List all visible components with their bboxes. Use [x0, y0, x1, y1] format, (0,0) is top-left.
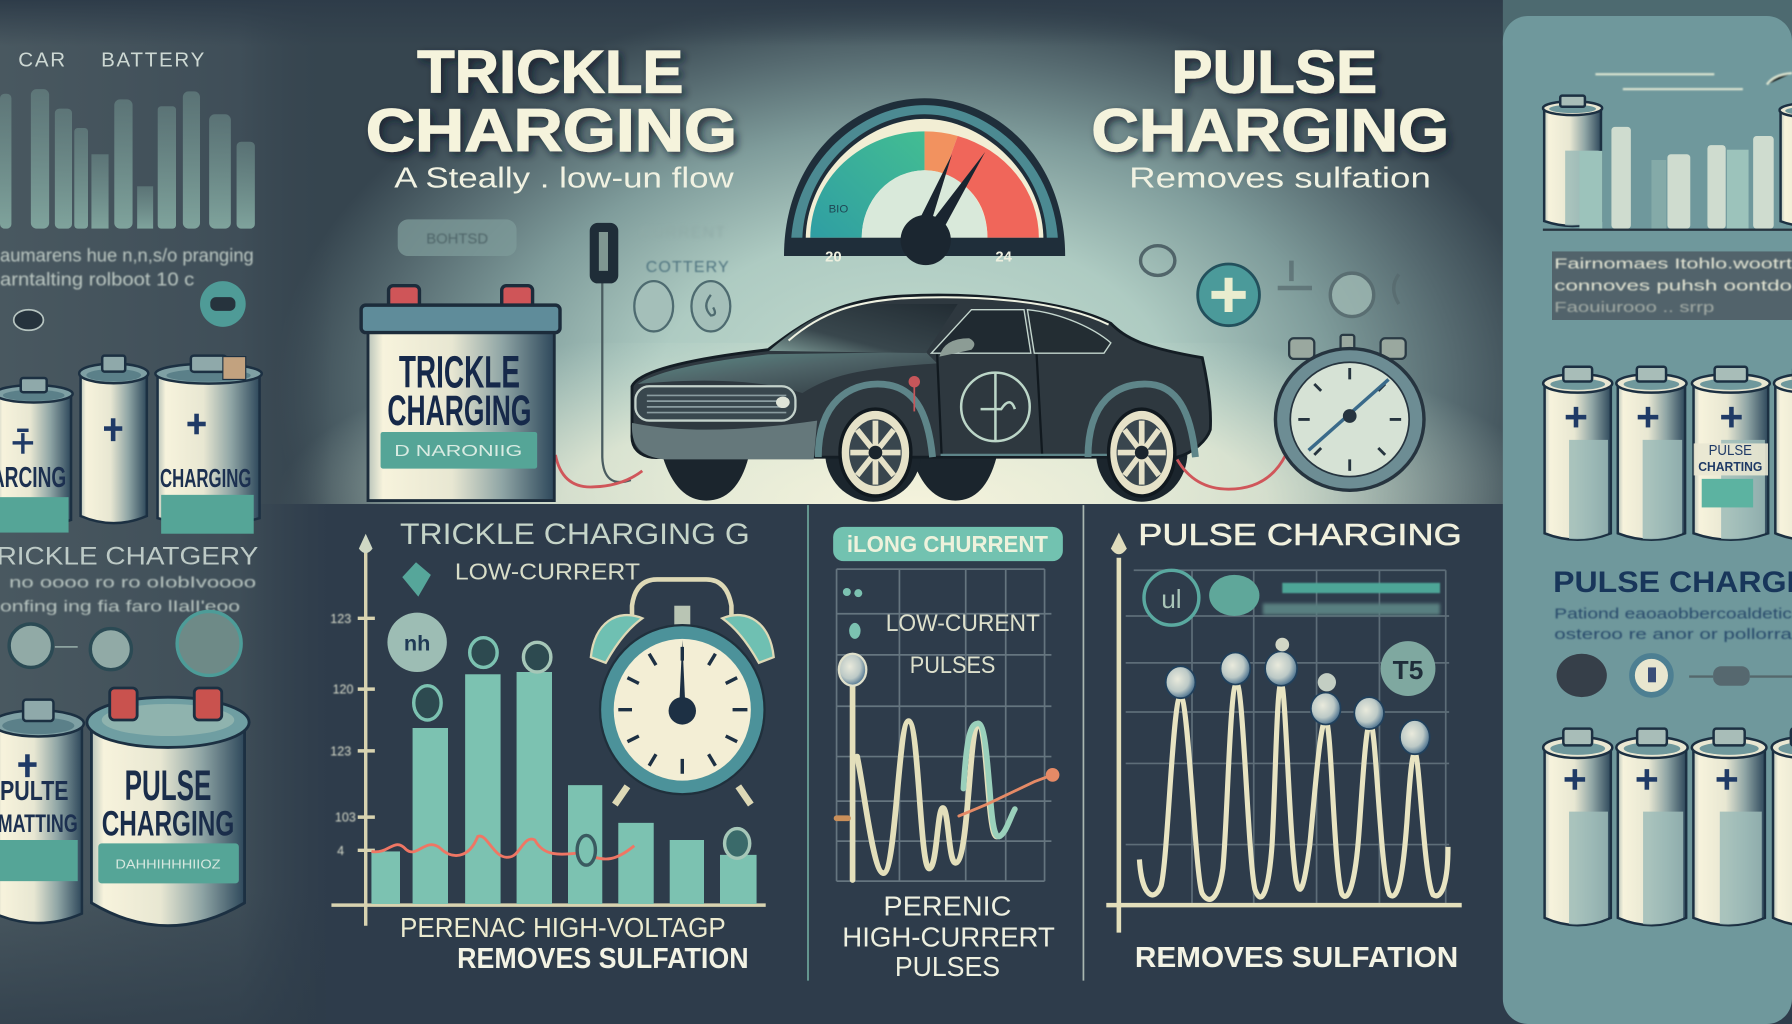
- axis labels: [330, 612, 356, 858]
- battery label text: TRICKLE: [399, 346, 520, 397]
- icon: teal blob: [402, 562, 431, 597]
- car front bumper: [632, 421, 817, 459]
- battery row 1: [1543, 367, 1792, 540]
- text block: blurred description: [1554, 606, 1792, 643]
- caption: periodic high-current pulses: PULSES: [895, 951, 1000, 982]
- alarm clock: [591, 579, 774, 805]
- mirror: [939, 338, 974, 357]
- axis labels: 4: [337, 844, 344, 858]
- heading: trickle charging: TRICKLE CHARGING G: [400, 518, 750, 551]
- caption: periodic high-voltage: PERENAC HIGH-VOLTAGP: [400, 912, 726, 943]
- axes: [331, 534, 766, 926]
- heading: pulse charging: PULSE CHARGING: [1138, 517, 1462, 552]
- front side window: [931, 310, 1031, 353]
- plug and cable: [590, 223, 631, 482]
- car emblem: [961, 373, 1030, 441]
- car body: [632, 295, 1211, 458]
- rear wheel: [1109, 409, 1175, 496]
- text block: blurred description top left: [0, 245, 254, 290]
- red trickle line: [371, 836, 634, 859]
- label: low-current: LOW-CURENT: [886, 610, 1040, 637]
- label: low-current: LOW-CURRERT: [455, 558, 640, 584]
- grid: [1126, 570, 1449, 903]
- decorative title lines: [1595, 73, 1792, 89]
- subtitle: removes sulfation: Removes sulfation: [1129, 162, 1431, 194]
- faded label pill: BOHTSD: [426, 231, 488, 247]
- caption: periodic high-current pulses: [842, 890, 1055, 982]
- battery: pulse charging: PULSE: [125, 762, 211, 809]
- battery: pulse charging: CHARGING: [102, 803, 234, 843]
- faded label pill: [398, 219, 517, 256]
- car hood: [638, 352, 937, 393]
- battery: pulse charging: DAHHIHHHIIOZ: [115, 858, 221, 872]
- text block: blurred description bottom left: onfing ing fia faro lIalI'eoo: [0, 598, 240, 615]
- title: trickle charging: TRICKLE: [417, 38, 683, 106]
- icons: two faded rings: [634, 281, 730, 331]
- battery label: pulse charging: [1694, 443, 1768, 507]
- charge port wire: [909, 376, 920, 411]
- pulse waveform: [1139, 682, 1448, 899]
- panel: right column: [1503, 0, 1792, 1024]
- title: trickle charging: CHARGING: [366, 96, 737, 164]
- battery: pulte matting: [0, 700, 84, 923]
- grid: [837, 569, 1051, 881]
- stopwatch: [1275, 335, 1424, 490]
- axis labels: 123: [330, 612, 351, 626]
- icon row: right: [1557, 654, 1792, 697]
- tyres and ground shadows: [663, 403, 1187, 502]
- bar chart: [371, 672, 757, 904]
- battery: trickle charging: [361, 286, 560, 501]
- text block: dark box: [1552, 251, 1792, 320]
- panel: left column: [0, 48, 262, 926]
- battery: pulte matting: PULTE: [0, 775, 69, 806]
- battery label: pulse charging: CHARTING: [1698, 460, 1762, 474]
- pulse line: [837, 681, 1059, 880]
- text block: dark box: connoves puhsh oontdo: [1554, 278, 1792, 294]
- badges above bars: nh: [404, 630, 430, 655]
- red wire: car to stopwatch: [1177, 455, 1286, 489]
- caption: periodic high-current pulses: PERENIC: [883, 890, 1011, 921]
- battery: middle plus: [79, 356, 148, 523]
- title: pulse charging: CHARGING: [1091, 96, 1449, 164]
- battery: top chart: [1543, 96, 1602, 226]
- small teal markers: [843, 588, 862, 639]
- label: cottery: COTTERY: [646, 259, 730, 276]
- gauge scale labels: 24: [995, 250, 1013, 266]
- badge: T5: T5: [1393, 655, 1423, 685]
- gauge: [784, 98, 1065, 266]
- icons: right faded row: [1141, 246, 1399, 326]
- caption: removes sulfation: REMOVES SULFATION: [457, 943, 749, 975]
- axis labels: 123: [330, 744, 351, 758]
- caption: periodic high-current pulses: HIGH-CURRERT: [842, 921, 1055, 952]
- title: pulse charging: [1091, 38, 1449, 164]
- text block: blurred description top left: arntalting rolboot 10 c: [0, 269, 194, 290]
- axes: [1106, 533, 1462, 933]
- bar chart: top left: [0, 89, 255, 229]
- label: pulses: PULSES: [910, 652, 995, 679]
- legend block: [1209, 575, 1440, 616]
- front wheel: [840, 409, 911, 496]
- text block: dark box: Fairnomaes Itohlo.wootrt: [1554, 257, 1792, 273]
- bar chart: top right: [1543, 127, 1792, 231]
- battery: left charging: [0, 378, 73, 533]
- battery row 2: [1543, 729, 1792, 925]
- roof highlight: [789, 297, 1109, 341]
- text block: blurred description top left: aumarens hue n,n,s/o pranging: [0, 245, 254, 266]
- heading: car battery: CAR BATTERY: [18, 48, 206, 71]
- gauge scale labels: [825, 250, 1013, 266]
- text block: blurred description bottom left: [0, 574, 256, 615]
- pill label: [833, 527, 1063, 561]
- text block: dark box: Faouiurooo .. srrp: [1554, 300, 1714, 316]
- grille: [635, 386, 795, 421]
- text block: blurred description: Pationd eaoaobbercoaldetic: [1554, 606, 1792, 622]
- windshield: [769, 304, 958, 353]
- title: pulse charging: PULSE: [1171, 38, 1377, 106]
- badge: ring: [1144, 570, 1199, 625]
- battery: trickle charging: D NARONIIG: [394, 443, 522, 460]
- icon: teal badge: [200, 281, 246, 327]
- icon: teal plus: [1198, 264, 1259, 326]
- battery: pulse charging: [87, 688, 249, 926]
- panel: pulse chart: [1106, 517, 1462, 974]
- badge: T5: [1381, 641, 1435, 696]
- wheel arches: [818, 384, 933, 457]
- icon: dark badge: [14, 310, 43, 330]
- red wire: battery to car: [555, 455, 642, 487]
- battery: right charging: [155, 356, 262, 534]
- pulse nodes: [1166, 638, 1430, 754]
- car: [632, 295, 1211, 502]
- badges above bars: [387, 613, 750, 865]
- panel: pulse mini chart: [833, 527, 1063, 982]
- gauge scale labels: 20: [825, 250, 842, 266]
- battery: pulte matting: MATTING: [0, 810, 78, 838]
- rear side window: [1027, 310, 1111, 353]
- battery: right charging: CHARGING: [160, 463, 251, 493]
- battery label text: CHARGING: [387, 387, 531, 434]
- axis labels: 103: [335, 811, 356, 825]
- pill label: iLONG CHURRENT: [847, 531, 1048, 557]
- panel: trickle chart: [330, 518, 774, 975]
- gauge: BIO: [829, 204, 848, 216]
- text block: blurred description bottom left: no oooo ro ro oIobIvoooo: [9, 574, 256, 591]
- top node: [839, 654, 866, 686]
- badge: ring: ul: [1161, 584, 1182, 614]
- title: trickle charging: [366, 38, 737, 164]
- battery label text: [387, 346, 531, 434]
- text block: blurred description: osteroo re anor or pollorra: [1554, 627, 1792, 643]
- battery: top right edge: [1779, 98, 1792, 226]
- icon row: three badges: [9, 611, 241, 675]
- battery label: pulse charging: PULSE: [1709, 443, 1752, 459]
- faded label: current: CURRENT: [640, 225, 726, 242]
- divider lines: [808, 505, 1083, 981]
- heading: trickle chatgery: RICKLE CHATGERY: [0, 543, 259, 571]
- axis labels: 120: [333, 683, 354, 697]
- door seams: [937, 354, 1042, 457]
- caption: removes sulfation: REMOVES SULFATION: [1135, 942, 1458, 974]
- heading: pulse chargi: PULSE CHARGI: [1553, 566, 1792, 599]
- subtitle: steady low current flow: A Steally . low-un flow: [394, 162, 734, 194]
